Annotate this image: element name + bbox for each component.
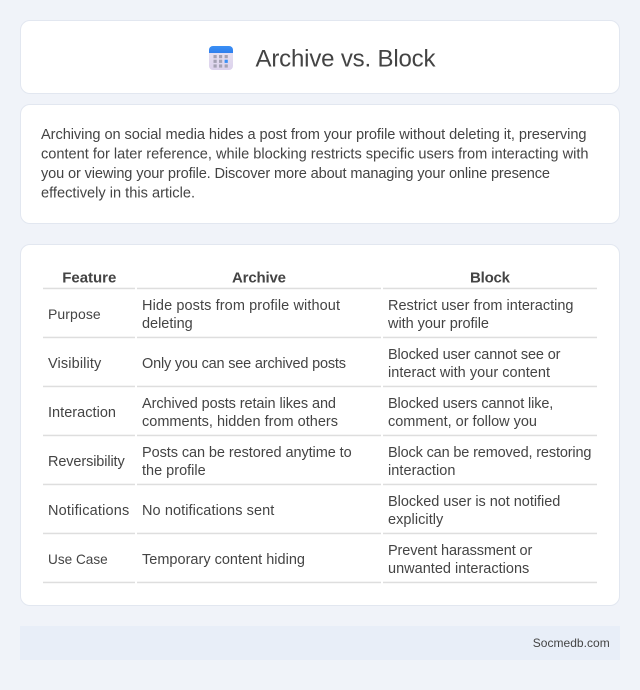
intro text: content for later reference, while blocking restricts specific users from interacting with [41, 146, 588, 162]
header row: Feature [62, 270, 116, 286]
row: Reversibility [48, 445, 592, 479]
row: Purpose: Restrict user from interacting [388, 298, 574, 314]
header row [62, 270, 511, 286]
intro text [41, 127, 588, 202]
intro text: Archiving on social media hides a post from your profile without deleting it, preserving [41, 127, 586, 143]
row: Reversibility: Reversibility [48, 454, 125, 470]
footer bar [20, 626, 620, 660]
intro text: you or viewing your profile. Discover more about managing your online presence [41, 166, 550, 182]
row: Notifications: explicitly [388, 512, 444, 528]
row: Interaction: Archived posts retain likes and [142, 396, 336, 412]
row: Use Case [48, 543, 532, 577]
row: Use Case: unwanted interactions [388, 561, 529, 577]
row: Interaction [48, 396, 553, 430]
comparison table [43, 270, 597, 583]
intro card [20, 104, 620, 224]
intro text: effectively in this article. [41, 186, 195, 202]
table card [20, 244, 620, 606]
header row: Block [470, 270, 511, 286]
icon: calendar [209, 46, 233, 70]
row: Purpose: Hide posts from profile without [142, 298, 340, 314]
row: Notifications: Notifications [48, 503, 129, 519]
row: Reversibility: interaction [388, 463, 456, 479]
row: Purpose: deleting [142, 316, 193, 332]
row: Visibility: interact with your content [388, 365, 550, 381]
row: Use Case: Temporary content hiding [142, 552, 305, 568]
row: Reversibility: Block can be removed, restoring [388, 445, 592, 461]
footer text: Socmedb.com [533, 636, 610, 650]
row: Notifications: Blocked user is not notified [388, 494, 560, 510]
row: Visibility [48, 347, 561, 381]
row: Notifications [48, 494, 560, 528]
row: Purpose: with your profile [387, 316, 489, 332]
row: Visibility: Only you can see archived posts [142, 356, 346, 372]
row: Purpose: Purpose [48, 306, 101, 322]
title: Archive vs. Block [256, 46, 436, 72]
row: Interaction: Interaction [48, 405, 116, 421]
row: Reversibility: Posts can be restored anytime to [142, 445, 352, 461]
header row: Archive [232, 270, 286, 286]
row: Notifications: No notifications sent [142, 503, 274, 519]
row: Use Case: Prevent harassment or [388, 543, 532, 559]
row: Reversibility: the profile [142, 463, 206, 479]
row: Visibility: Blocked user cannot see or [388, 347, 561, 363]
row: Visibility: Visibility [48, 356, 102, 372]
row: Interaction: Blocked users cannot like, [388, 396, 553, 412]
row: Interaction: comments, hidden from others [142, 414, 338, 430]
row: Purpose [48, 298, 574, 332]
row: Interaction: comment, or follow you [388, 414, 537, 430]
row: Use Case: Use Case [48, 552, 108, 567]
title card [20, 20, 620, 94]
